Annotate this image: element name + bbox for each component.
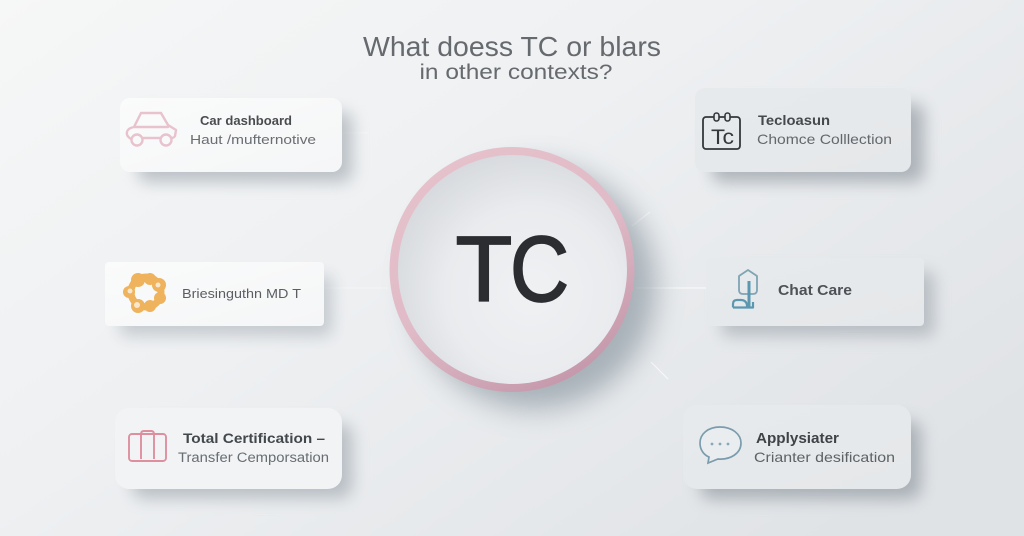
card: total certification xyxy=(115,408,352,498)
icon: calendar TC: Tc xyxy=(711,126,734,149)
card: Tecloasun: Chomce Colllection xyxy=(757,131,892,147)
icon: orange ring xyxy=(123,273,166,313)
card: total certification: Transfer Cemporsation xyxy=(178,450,329,465)
text: Tecloasun: Tecloasun xyxy=(758,112,830,128)
central TC badge xyxy=(390,147,656,409)
text: car dashboard: Car dashboard xyxy=(200,113,292,128)
text: Applysiater: Applysiater xyxy=(756,431,839,447)
label: TC: T xyxy=(456,217,512,321)
card: car dashboard xyxy=(120,98,352,182)
text: chat care: Chat Care xyxy=(778,283,852,299)
icon: briefcase xyxy=(129,431,166,461)
card: chat care xyxy=(706,258,934,336)
card: Applysiater: Crianter desification xyxy=(754,449,895,465)
card: Tecloasun xyxy=(695,88,924,182)
title xyxy=(363,31,661,84)
title: in other contexts? xyxy=(420,61,612,84)
card: Applysiater xyxy=(683,405,921,499)
text: Briesinguthn: Briesinguthn MD T xyxy=(182,286,301,301)
connector lines xyxy=(324,133,706,379)
label: TC xyxy=(456,217,569,321)
icon: car xyxy=(127,113,176,146)
icon: speech bubble xyxy=(700,427,741,463)
card: Briesinguthn xyxy=(105,262,332,336)
card: car dashboard: Haut /mufternotive xyxy=(190,132,316,147)
title: What doess TC or blars xyxy=(363,31,661,62)
icon: calendar TC xyxy=(703,113,740,149)
label: TC: C xyxy=(510,217,569,321)
text: total certification: Total Certification – xyxy=(183,430,325,446)
icon: chat care xyxy=(733,270,757,308)
